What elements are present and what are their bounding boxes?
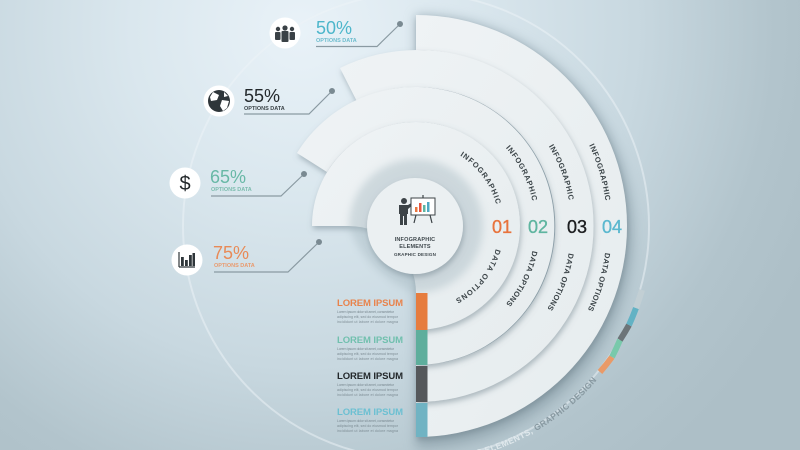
icon: globe (204, 86, 234, 116)
stat: 55%: OPTIONS DATA (244, 106, 285, 112)
ring curved labels: DATA OPTIONS (506, 251, 538, 306)
icon: dollar: $ (179, 173, 191, 195)
ring curved labels (456, 143, 610, 312)
ring curved labels: DATA OPTIONS (588, 253, 610, 312)
ring curved labels: DATA OPTIONS (548, 254, 574, 310)
list item: teal: incididunt ut labore et dolore magna (337, 357, 398, 361)
list item: blue: adipiscing elit, sed do eiusmod tempor (337, 424, 399, 428)
ring curved labels: INFOGRAPHIC (549, 144, 574, 200)
icon: dollar (170, 168, 200, 198)
ring curved labels: INFOGRAPHIC (506, 144, 537, 200)
large thin guide circle (183, 0, 649, 450)
list item: teal (337, 335, 403, 361)
hub recess shading (349, 159, 483, 293)
list item: blue: Lorem ipsum dolor sit amet, consectetur (337, 419, 395, 423)
ring curved labels: INFOGRAPHIC (589, 143, 610, 200)
list item: orange: adipiscing elit, sed do eiusmod tempor (337, 315, 399, 319)
stat: 55%: 55% (244, 86, 280, 106)
list item: teal: LOREM IPSUM (337, 335, 403, 346)
central caption: ELEMENTS (399, 244, 431, 250)
list item: dark: incididunt ut labore et dolore magna (337, 393, 398, 397)
list item: dark (337, 371, 403, 397)
list item: orange: LOREM IPSUM (337, 298, 403, 309)
ring curved labels: INFOGRAPHIC (460, 152, 501, 204)
list item: dark: adipiscing elit, sed do eiusmod tempor (337, 388, 399, 392)
stat: 50%: 50% (316, 18, 352, 38)
list item: teal: Lorem ipsum dolor sit amet, consectetur (337, 347, 395, 351)
list item: dark: LOREM IPSUM (337, 371, 403, 382)
list item: orange (337, 298, 403, 324)
stat: 65%: OPTIONS DATA (211, 187, 252, 193)
list item: teal: adipiscing elit, sed do eiusmod tempor (337, 352, 399, 356)
icon: presenter with chart board (399, 195, 435, 225)
list item: orange: incididunt ut labore et dolore magna (337, 320, 398, 324)
central caption: GRAPHIC DESIGN (394, 252, 436, 257)
ring numbers: 04 (602, 217, 622, 237)
stat: 50% (316, 18, 357, 44)
list item: blue (337, 407, 403, 433)
ring numbers: 03 (567, 217, 587, 237)
central caption: INFOGRAPHIC (395, 237, 435, 243)
stat: 65%: 65% (210, 167, 246, 187)
ring numbers (492, 217, 622, 237)
ring numbers: 02 (528, 217, 548, 237)
outer shadow band (416, 15, 633, 449)
central disc (367, 178, 463, 274)
ring numbers: 01 (492, 217, 512, 237)
stat: 75% (213, 243, 255, 269)
ring 02 (297, 87, 554, 365)
colored arc segments (600, 290, 642, 372)
stat: 50%: OPTIONS DATA (316, 38, 357, 44)
central caption (394, 237, 436, 257)
stat: 75%: OPTIONS DATA (214, 263, 255, 269)
icon: people (270, 18, 300, 48)
list item: blue: incididunt ut labore et dolore magna (337, 429, 398, 433)
color tabs (416, 293, 428, 437)
stat: 75%: 75% (213, 243, 249, 263)
concentric ring stack (297, 15, 627, 437)
ring 03 (340, 50, 594, 402)
list item: orange: Lorem ipsum dolor sit amet, consectetur (337, 310, 395, 314)
icon: bar chart (172, 244, 202, 276)
ring 01 (312, 122, 520, 330)
stat: 65% (210, 167, 252, 193)
list item: dark: Lorem ipsum dolor sit amet, consectetur (337, 383, 395, 387)
stat: 55% (244, 86, 285, 112)
ring curved labels: DATA OPTIONS (456, 249, 501, 303)
leader lines (211, 24, 400, 272)
ring 04 (416, 15, 627, 437)
leader dots (301, 21, 403, 245)
list item: blue: LOREM IPSUM (337, 407, 403, 418)
